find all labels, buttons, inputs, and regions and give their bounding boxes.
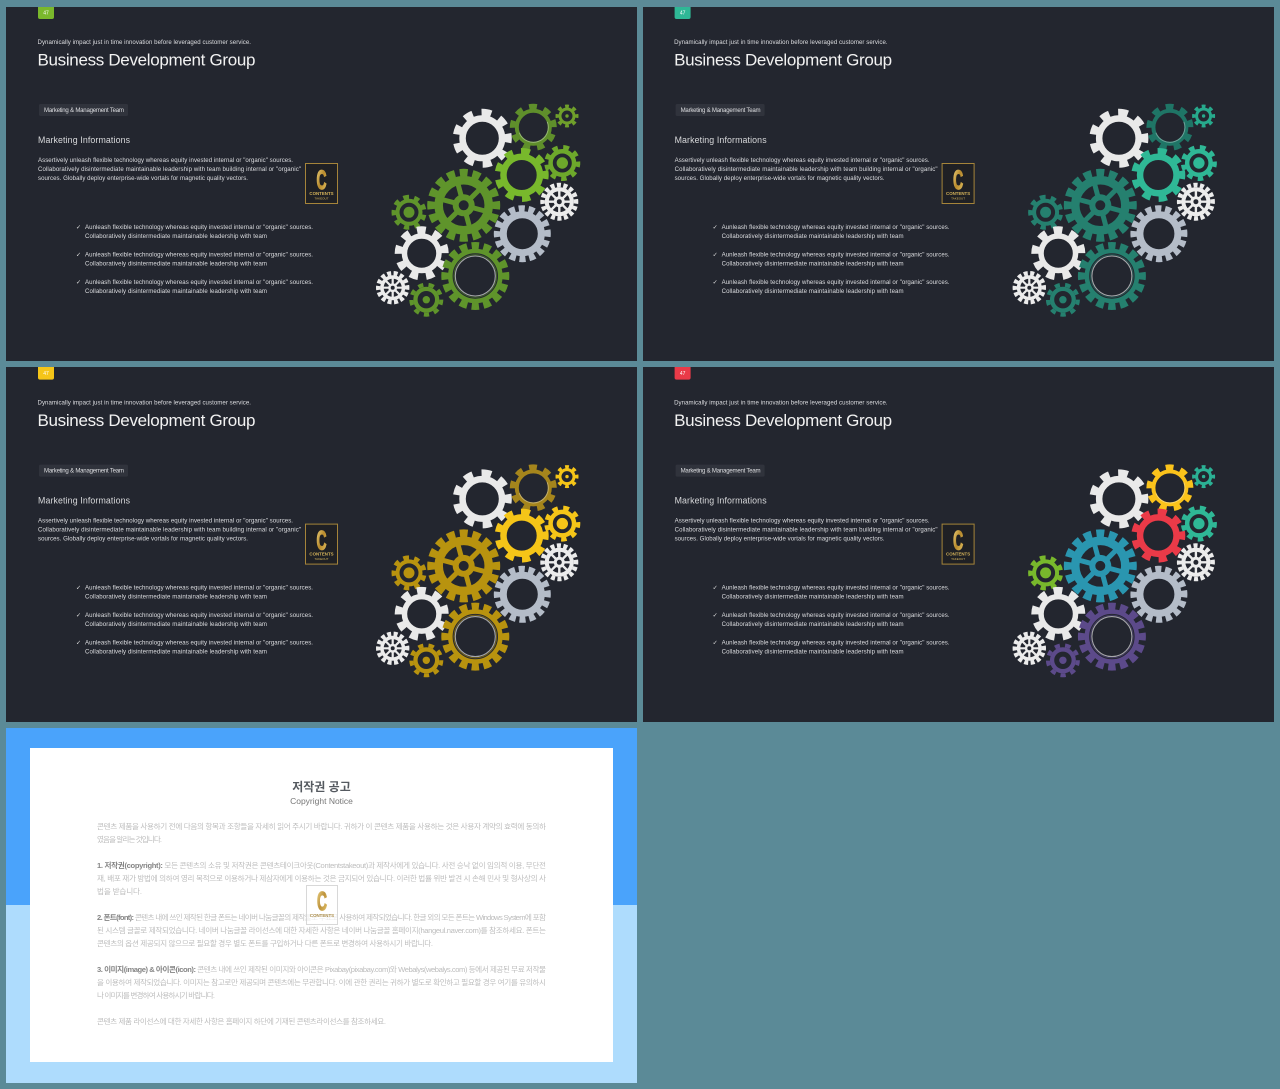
- team tag: Marketing & Management Team: [681, 107, 761, 114]
- intro text: 콘텐츠 제품을 사용하기 전에 다음의 항목과 조항들을 자세히 읽어 주시기 바랍니다. 귀하가 이 콘텐츠 제품을 사용하는 것은 사용자 계약의 효력에 동의하: [97, 821, 546, 831]
- paragraph: Collaboratively disintermediate maintainable leadership with team building internal or "organic": [38, 166, 301, 173]
- bullet 2: Collaboratively disintermediate maintainable leadership with team: [85, 260, 267, 268]
- bullet 3: Collaboratively disintermediate maintainable leadership with team: [722, 649, 904, 656]
- watermark logo: [306, 886, 338, 924]
- team tag: [676, 465, 765, 477]
- gear cluster: [378, 106, 582, 319]
- panel: copyright notice: [6, 728, 637, 1083]
- title: Business Development Group: [38, 411, 256, 430]
- badge: [675, 7, 691, 19]
- paragraph: [675, 518, 938, 543]
- badge: [38, 367, 54, 380]
- logo: [306, 524, 338, 564]
- logo: TAKEOUT: [315, 196, 329, 200]
- section heading: Marketing Informations: [38, 135, 131, 145]
- logo: C: [316, 165, 326, 195]
- notice subheading: Copyright Notice: [290, 796, 353, 806]
- badge: 47: [680, 10, 686, 16]
- bullet 1: Collaboratively disintermediate maintainable leadership with team: [85, 594, 267, 601]
- clause 2: [97, 912, 546, 948]
- clause 2: 콘텐츠의 옵션 제공되지 않으므로 필요할 경우 별도 폰트를 구입하거나 다른 폰트로 변경하여 사용하시기 바랍니다.: [97, 938, 433, 948]
- paragraph: Assertively unleash flexible technology whereas equity invested internal or "organic" sources.: [675, 157, 930, 164]
- team tag: Marketing & Management Team: [44, 468, 124, 475]
- logo: [942, 524, 974, 564]
- closing note: 콘텐츠 제품 라이선스에 대한 자세한 사항은 홈페이지 하단에 기재된 콘텐츠라이선스를 참조하세요.: [97, 1016, 386, 1026]
- notice heading: 저작권 공고: [292, 779, 351, 794]
- bullet list: [76, 224, 313, 295]
- panel: multicolour gears slide: [643, 367, 1274, 722]
- bullet 3: Collaboratively disintermediate maintainable leadership with team: [85, 288, 267, 295]
- badge: 47: [43, 10, 49, 16]
- clause 3: 나 이미지를 변경하여 사용하시기 바랍니다.: [97, 990, 215, 1000]
- bullet 3: ✓: [76, 279, 81, 286]
- badge: [675, 367, 691, 380]
- title: Business Development Group: [38, 50, 256, 70]
- paragraph: [38, 518, 301, 543]
- bullet 3: [76, 640, 313, 656]
- intro text: [97, 821, 546, 844]
- bullet 2: [76, 612, 313, 628]
- bullet 1: Aunleash flexible technology whereas equity invested internal or "organic" sources.: [85, 585, 313, 592]
- bullet 2: Aunleash flexible technology whereas equity invested internal or "organic" sources.: [722, 252, 950, 258]
- badge: 47: [43, 371, 49, 377]
- clause 3: 3. 이미지(image) & 아이콘(icon): 콘텐츠 내에 쓰인 제작된 이미지와 아이콘은 Pixabay(pixabay.com)와 Webalys(webalys.com) 등에서 제공된 무료 저작물: [97, 964, 546, 974]
- bullet 2: Collaboratively disintermediate maintainable leadership with team: [722, 621, 904, 628]
- team tag: [676, 104, 765, 116]
- bullet 3: [76, 279, 313, 295]
- bullet list: [713, 224, 950, 295]
- bullet list: [713, 585, 950, 656]
- paragraph: [38, 157, 301, 182]
- subtitle: Dynamically impact just in time innovation before leveraged customer service.: [38, 39, 251, 46]
- logo: TAKEOUT: [951, 196, 965, 200]
- logo: [942, 164, 974, 204]
- bullet 3: [713, 279, 950, 295]
- bullet 2: ✓: [76, 252, 81, 258]
- logo: TAKEOUT: [315, 557, 329, 561]
- bullet 1: [76, 224, 313, 240]
- clause 2: 된 시스템 글꼴로 제작되었습니다. 네이버 나눔글꼴 라이선스에 대한 자세한 사항은 네이버 나눔글꼴 홈페이지(hangeul.naver.com)를 참조하세요. 폰트는: [97, 925, 546, 935]
- bullet 3: Aunleash flexible technology whereas equity invested internal or "organic" sources.: [722, 640, 950, 647]
- clause 1: [97, 860, 546, 896]
- bullet 3: ✓: [713, 279, 718, 286]
- bullet 3: Aunleash flexible technology whereas equity invested internal or "organic" sources.: [85, 279, 313, 286]
- logo: [306, 164, 338, 204]
- bullet 1: Collaboratively disintermediate maintainable leadership with team: [722, 233, 904, 240]
- paragraph: sources. Globally deploy enterprise-wide vortals for magnetic quality vectors.: [38, 175, 248, 182]
- paragraph: sources. Globally deploy enterprise-wide vortals for magnetic quality vectors.: [675, 536, 885, 543]
- bullet 3: Aunleash flexible technology whereas equity invested internal or "organic" sources.: [85, 640, 313, 647]
- bullet 2: ✓: [713, 612, 718, 619]
- paragraph: [675, 157, 938, 182]
- paragraph: Collaboratively disintermediate maintainable leadership with team building internal or "organic": [675, 166, 938, 173]
- notice card: [30, 748, 613, 1062]
- bullet 3: ✓: [76, 640, 81, 647]
- bullet 2: Aunleash flexible technology whereas equity invested internal or "organic" sources.: [722, 612, 950, 619]
- bullet 1: ✓: [713, 585, 718, 592]
- watermark logo: CONTENTS: [310, 913, 334, 918]
- bullet 1: Aunleash flexible technology whereas equity invested internal or "organic" sources.: [85, 224, 313, 231]
- badge: [38, 7, 54, 19]
- paragraph: Assertively unleash flexible technology whereas equity invested internal or "organic" sources.: [38, 157, 293, 164]
- paragraph: sources. Globally deploy enterprise-wide vortals for magnetic quality vectors.: [38, 536, 248, 543]
- bullet 3: [713, 640, 950, 656]
- subtitle: Dynamically impact just in time innovation before leveraged customer service.: [674, 39, 888, 46]
- team tag: [39, 465, 128, 477]
- title: Business Development Group: [674, 50, 892, 70]
- bullet 1: [713, 585, 950, 601]
- bullet 2: Collaboratively disintermediate maintainable leadership with team: [722, 260, 904, 268]
- logo: C: [953, 526, 963, 556]
- logo: C: [953, 165, 963, 195]
- bullet list: [76, 585, 313, 656]
- bullet 2: [76, 252, 313, 268]
- gear cluster: [378, 467, 582, 680]
- clause 1: 법을 받습니다.: [97, 886, 142, 896]
- gear cluster: [1015, 106, 1218, 319]
- subtitle: Dynamically impact just in time innovation before leveraged customer service.: [674, 400, 888, 407]
- clause 3: 을 이용하여 제작되었습니다. 이미지는 참고로만 제공되며 콘텐츠에는 무관합니다. 이에 관한 권리는 귀하가 별도로 확인하고 필요할 경우 여기를 유의하시: [97, 977, 546, 987]
- paragraph: Assertively unleash flexible technology whereas equity invested internal or "organic" sources.: [675, 518, 930, 525]
- bullet 2: [713, 252, 950, 268]
- bullet 2: [713, 612, 950, 628]
- bullet 2: Collaboratively disintermediate maintainable leadership with team: [85, 621, 267, 628]
- intro text: 였음을 알리는 것입니다.: [97, 834, 162, 844]
- logo: TAKEOUT: [951, 557, 965, 561]
- clause 2: 2. 폰트(font): 콘텐츠 내에 쓰인 제작된 한글 폰트는 네이버 나눔글꼴의 제작물로 무료로 사용하여 제작되었습니다. 한글 외의 모든 폰트는 Windows System에 포함: [97, 912, 546, 922]
- bullet 2: Aunleash flexible technology whereas equity invested internal or "organic" sources.: [85, 252, 313, 258]
- panel: green gears slide: [6, 7, 637, 361]
- gear cluster: [1015, 467, 1218, 680]
- bullet 3: Collaboratively disintermediate maintainable leadership with team: [85, 649, 267, 656]
- bullet 1: Aunleash flexible technology whereas equity invested internal or "organic" sources.: [722, 585, 950, 592]
- bullet 3: ✓: [713, 640, 718, 647]
- bullet 1: Aunleash flexible technology whereas equity invested internal or "organic" sources.: [722, 224, 950, 231]
- bullet 3: Collaboratively disintermediate maintainable leadership with team: [722, 288, 904, 295]
- watermark logo: C: [317, 886, 327, 916]
- badge: 47: [680, 371, 686, 377]
- bullet 1: Collaboratively disintermediate maintainable leadership with team: [85, 233, 267, 240]
- clause 1: 1. 저작권(copyright): 모든 콘텐츠의 소유 및 저작권은 콘텐츠테이크아웃(Contentstakeout)과 제작사에게 있습니다. 사전 승낙 없이 임의적 이용, 무단전: [97, 860, 546, 870]
- bullet 1: Collaboratively disintermediate maintainable leadership with team: [722, 594, 904, 601]
- logo: CONTENTS: [309, 552, 334, 557]
- panel: teal gears slide: [643, 7, 1274, 361]
- bullet 2: ✓: [713, 252, 718, 258]
- paragraph: Collaboratively disintermediate maintainable leadership with team building internal or "organic": [38, 527, 301, 534]
- title: Business Development Group: [674, 411, 892, 430]
- bullet 2: ✓: [76, 612, 81, 619]
- clause 1: 재, 배포 재가 방법에 의하여 영리 목적으로 이용하거나 제삼자에게 이용하는 것은 금지되어 있습니다. 이러한 법률 위반 발견 시 손해 민사 및 형사상의 사: [97, 873, 546, 883]
- logo: C: [316, 526, 326, 556]
- section heading: Marketing Informations: [675, 135, 767, 145]
- bullet 1: ✓: [76, 224, 81, 231]
- bullet 1: [713, 224, 950, 240]
- panel: gold gears slide: [6, 367, 637, 722]
- bullet 1: ✓: [76, 585, 81, 592]
- team tag: [39, 104, 128, 116]
- logo: CONTENTS: [946, 191, 970, 196]
- subtitle: Dynamically impact just in time innovation before leveraged customer service.: [38, 400, 251, 407]
- bullet 1: [76, 585, 313, 601]
- bullet 2: Aunleash flexible technology whereas equity invested internal or "organic" sources.: [85, 612, 313, 619]
- paragraph: Collaboratively disintermediate maintainable leadership with team building internal or "organic": [675, 527, 938, 534]
- logo: CONTENTS: [946, 552, 970, 557]
- team tag: Marketing & Management Team: [44, 107, 124, 114]
- section heading: Marketing Informations: [675, 496, 767, 506]
- bullet 3: Aunleash flexible technology whereas equity invested internal or "organic" sources.: [722, 279, 950, 286]
- clause 3: [97, 964, 546, 1000]
- team tag: Marketing & Management Team: [681, 468, 761, 475]
- logo: CONTENTS: [309, 191, 334, 196]
- bullet 1: ✓: [713, 224, 718, 231]
- section heading: Marketing Informations: [38, 496, 131, 506]
- paragraph: sources. Globally deploy enterprise-wide vortals for magnetic quality vectors.: [675, 175, 885, 182]
- paragraph: Assertively unleash flexible technology whereas equity invested internal or "organic" sources.: [38, 518, 293, 525]
